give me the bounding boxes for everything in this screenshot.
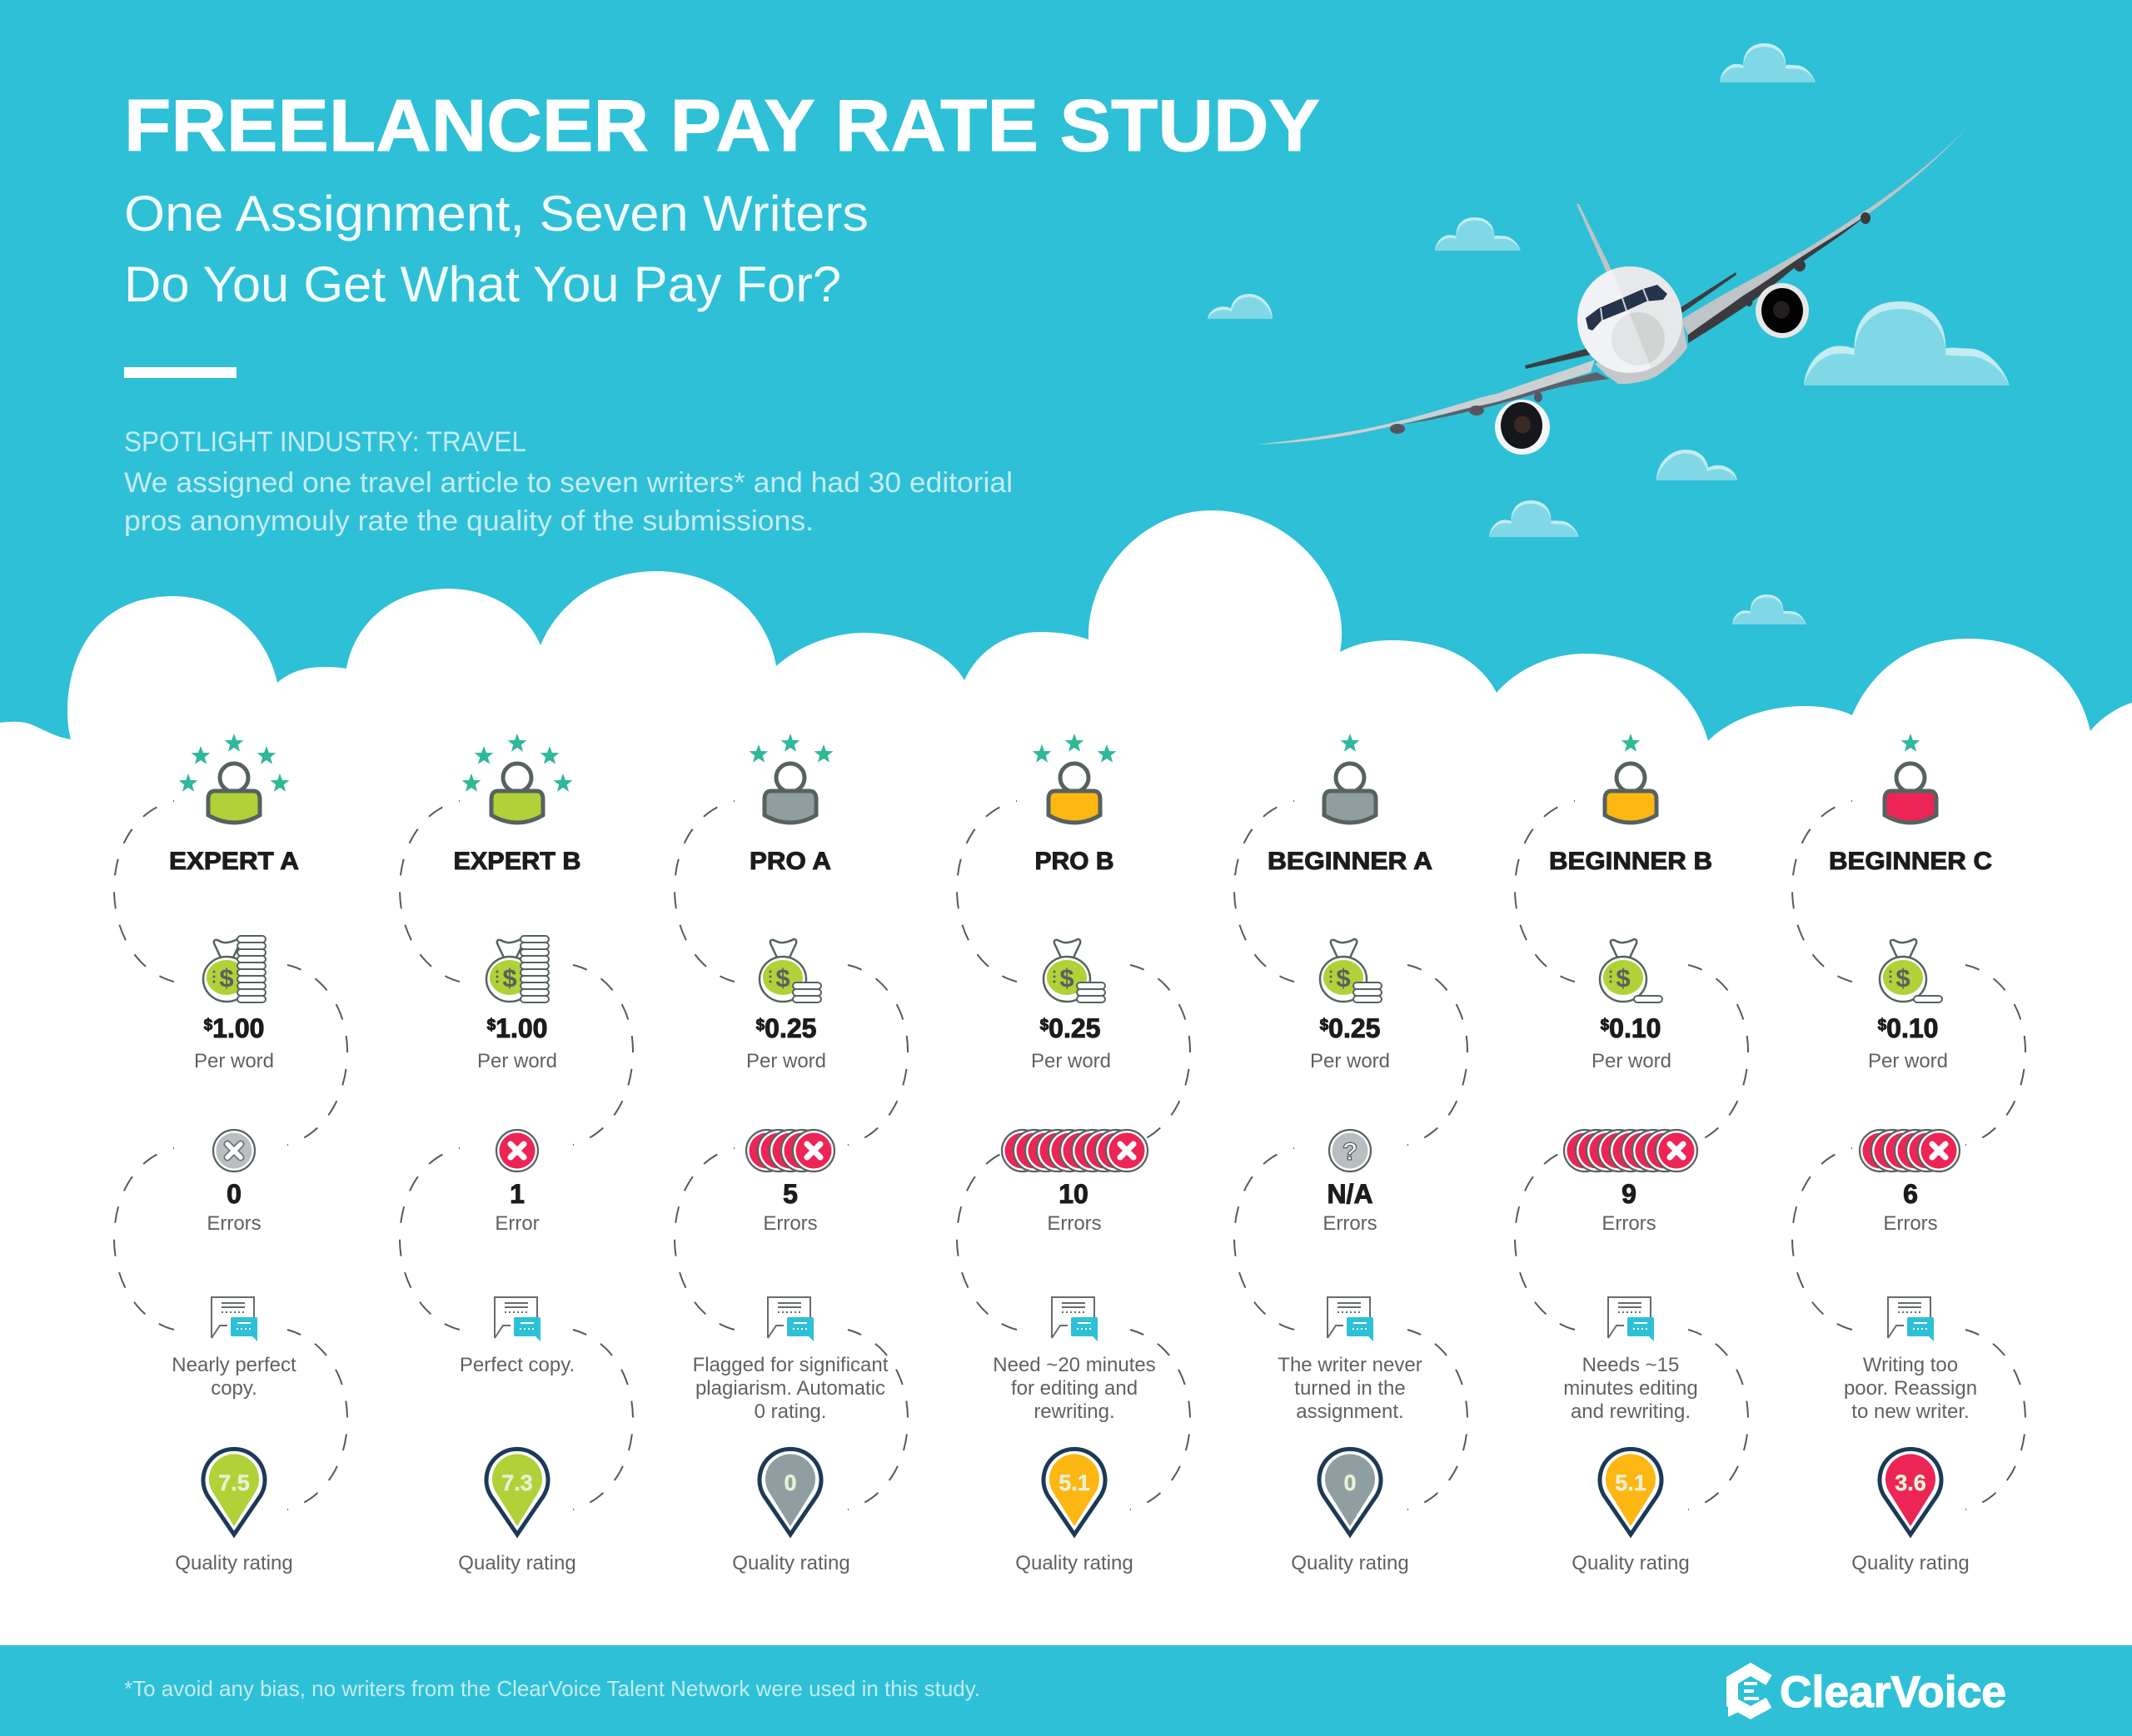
plane nose [1577, 266, 1682, 373]
per word label: Per word [1310, 1050, 1390, 1072]
rating stars [179, 734, 289, 792]
rating pin [486, 1449, 548, 1535]
right engine [1756, 283, 1809, 338]
rating pin [203, 1449, 265, 1535]
rating pin [1880, 1449, 1941, 1535]
icon: comment bubbles [495, 1297, 540, 1341]
column: Beginner C [1792, 734, 2025, 1574]
connector dashes [1515, 801, 1748, 1510]
left wing [1256, 360, 1595, 445]
pay rate: 0.25 [765, 1013, 816, 1043]
rating pin [760, 1449, 821, 1535]
connector dashes [1234, 801, 1467, 1510]
icon: money bag and coins [486, 936, 549, 1002]
right wing underside [1688, 212, 1870, 343]
footer band [0, 1645, 2132, 1736]
pay rate: 0.10 [1886, 1013, 1938, 1043]
icon: error badges [746, 1130, 834, 1171]
quality rating label: Quality rating [1851, 1552, 1970, 1574]
error count: 5 [783, 1179, 798, 1209]
errors label: Error [495, 1212, 540, 1235]
column: Beginner B [1515, 734, 1748, 1574]
icon: error badges [1002, 1130, 1148, 1171]
editor comment: assignment. [1296, 1400, 1404, 1423]
cockpit windows [1586, 285, 1667, 331]
rating value: 3.6 [1895, 1470, 1926, 1495]
errors label: Errors [1323, 1212, 1377, 1235]
errors label: Errors [1047, 1212, 1102, 1235]
icon: person [1885, 764, 1936, 823]
editor comment: Need ~20 minutes [993, 1354, 1156, 1376]
icon: money bag and coins [1044, 939, 1105, 1002]
right wing [1681, 123, 1971, 335]
pay rate: $ [204, 1017, 213, 1034]
rating star [1621, 734, 1640, 752]
writer name: EXPERT A [169, 848, 299, 875]
wing flap fairings [1390, 212, 1870, 434]
icon: money bag and coin [1600, 939, 1662, 1002]
icon: error badge [496, 1130, 538, 1171]
white cloud bank [0, 510, 2132, 1645]
connector dashes [1792, 801, 2025, 1510]
icon: comment bubbles [212, 1297, 257, 1341]
icon: money bag and coin [1880, 939, 1942, 1002]
rating star [1901, 734, 1920, 752]
errors label: Errors [1601, 1212, 1656, 1235]
icon: unknown error badge [1329, 1130, 1371, 1171]
icon: person [1324, 764, 1376, 823]
small sky clouds [1208, 43, 2010, 624]
subtitle line 2: Do You Get What You Pay For? [124, 256, 841, 312]
ClearVoice logo [1728, 1668, 2006, 1717]
pay rate: $ [1601, 1017, 1610, 1034]
icon: person [1605, 764, 1656, 823]
writer name: BEGINNER C [1829, 848, 1992, 875]
editor comment: 0 rating. [755, 1400, 826, 1423]
writer name: PRO A [750, 848, 831, 875]
quality rating label: Quality rating [732, 1552, 850, 1574]
editor comment: copy. [211, 1377, 257, 1400]
editor comment: Nearly perfect [172, 1354, 296, 1376]
icon: error badges [1860, 1130, 1960, 1171]
pay rate: $ [756, 1017, 765, 1034]
icon: comment bubbles [1052, 1297, 1098, 1341]
rating star [1341, 734, 1359, 752]
editor comment: Needs ~15 [1582, 1354, 1679, 1376]
rating value: 7.3 [501, 1470, 533, 1495]
column: Expert B [400, 734, 633, 1574]
quality rating label: Quality rating [1572, 1552, 1690, 1574]
editor comment: poor. Reassign [1844, 1377, 1977, 1400]
rating stars [462, 734, 572, 792]
spotlight text block [124, 426, 1013, 537]
per word label: Per word [746, 1050, 826, 1072]
editor comment: for editing and [1011, 1377, 1138, 1400]
pay rate: $ [1878, 1017, 1887, 1034]
error count: 1 [510, 1179, 525, 1209]
icon: comment bubbles [1328, 1297, 1373, 1341]
plane stabilisers [1525, 272, 1736, 369]
pay rate: 0.25 [1049, 1013, 1100, 1043]
nose shading [1611, 266, 1682, 368]
icon: person [765, 764, 816, 823]
plane tail fin [1577, 204, 1611, 272]
error count: 10 [1059, 1179, 1088, 1209]
icon: person [208, 764, 260, 823]
airplane illustration [1256, 123, 1971, 455]
spotlight text block: We assigned one travel article to seven writers* and had 30 editorial [124, 467, 1013, 499]
left wing underside [1402, 372, 1609, 425]
pay rate: 1.00 [496, 1013, 547, 1043]
error count: 9 [1621, 1179, 1636, 1209]
subtitle line 1: One Assignment, Seven Writers [124, 186, 869, 241]
pay rate: $ [487, 1017, 496, 1034]
writer name: PRO B [1034, 848, 1114, 875]
pay rate: $ [1320, 1017, 1329, 1034]
column: Pro B [957, 734, 1190, 1574]
editor comment: plagiarism. Automatic [695, 1377, 885, 1400]
icon: person [1049, 764, 1100, 823]
error count: 6 [1903, 1179, 1918, 1209]
spotlight text block: pros anonymouly rate the quality of the submissions. [124, 505, 814, 537]
editor comment: rewriting. [1034, 1400, 1115, 1423]
connector dashes [957, 801, 1190, 1510]
title: FREELANCER PAY RATE STUDY [124, 84, 1320, 167]
pay rate: $ [1040, 1017, 1049, 1034]
icon: unknown error badge: ? [1342, 1138, 1357, 1166]
pay rate: 0.25 [1328, 1013, 1380, 1043]
per word label: Per word [1031, 1050, 1111, 1072]
per word label: Per word [194, 1050, 274, 1072]
logo icon [1728, 1669, 1769, 1717]
error count: N/A [1327, 1179, 1373, 1209]
editor comment: Flagged for significant [693, 1354, 888, 1376]
rating stars [1033, 734, 1116, 763]
quality rating label: Quality rating [1291, 1552, 1409, 1574]
editor comment: to new writer. [1851, 1400, 1970, 1423]
spotlight text block: SPOTLIGHT INDUSTRY: TRAVEL [124, 426, 526, 458]
icon: comment bubbles [1608, 1297, 1654, 1341]
editor comment: Perfect copy. [460, 1354, 575, 1376]
quality rating label: Quality rating [175, 1552, 293, 1574]
connector dashes [400, 801, 633, 1510]
column: Expert A [114, 734, 347, 1574]
writer name: BEGINNER A [1268, 848, 1432, 875]
writer name: BEGINNER B [1549, 848, 1712, 875]
icon: error badges [1564, 1130, 1697, 1171]
icon: person [491, 764, 543, 823]
editor comment: Writing too [1863, 1354, 1958, 1376]
rating value: 0 [1343, 1470, 1357, 1495]
nose disc shadow [1630, 312, 1665, 363]
quality rating label: Quality rating [1015, 1552, 1133, 1574]
icon: comment bubbles [1888, 1297, 1934, 1341]
editor comment: The writer never [1278, 1354, 1422, 1376]
errors label: Errors [207, 1212, 262, 1235]
column: Beginner A [1234, 734, 1467, 1574]
per word label: Per word [1592, 1050, 1671, 1072]
rating value: 7.5 [218, 1470, 250, 1495]
writer name: EXPERT B [453, 848, 581, 875]
rating value: 0 [784, 1470, 797, 1495]
rating value: 5.1 [1615, 1470, 1646, 1495]
editor comment: and rewriting. [1571, 1400, 1691, 1423]
pay rate: 0.10 [1609, 1013, 1661, 1043]
errors label: Errors [1883, 1212, 1938, 1235]
rating pin [1600, 1449, 1661, 1535]
editor comment: minutes editing [1563, 1377, 1698, 1400]
icon: comment bubbles [768, 1297, 814, 1341]
rating pin [1319, 1449, 1381, 1535]
left engine [1495, 400, 1550, 455]
rating pin [1044, 1449, 1105, 1535]
footnote: *To avoid any bias, no writers from the ClearVoice Talent Network were used in this study. [124, 1676, 980, 1701]
connector dashes [114, 801, 347, 1510]
error count: 0 [227, 1179, 242, 1209]
rating stars [750, 734, 833, 763]
heading divider bar [124, 367, 237, 378]
column: Pro A [675, 734, 908, 1574]
pay rate: 1.00 [212, 1013, 264, 1043]
plane belly [1595, 319, 1687, 384]
icon: money bag and coins [760, 939, 821, 1002]
editor comment: turned in the [1294, 1377, 1406, 1400]
icon: money bag and coins [203, 936, 266, 1002]
per word label: Per word [477, 1050, 557, 1072]
rating value: 5.1 [1059, 1470, 1090, 1495]
per word label: Per word [1868, 1050, 1948, 1072]
quality rating label: Quality rating [458, 1552, 576, 1574]
errors label: Errors [763, 1212, 818, 1235]
icon: error badge [213, 1130, 255, 1171]
connector dashes [675, 801, 908, 1510]
icon: money bag and coins [1320, 939, 1382, 1002]
logo wordmark: ClearVoice [1780, 1668, 2006, 1717]
